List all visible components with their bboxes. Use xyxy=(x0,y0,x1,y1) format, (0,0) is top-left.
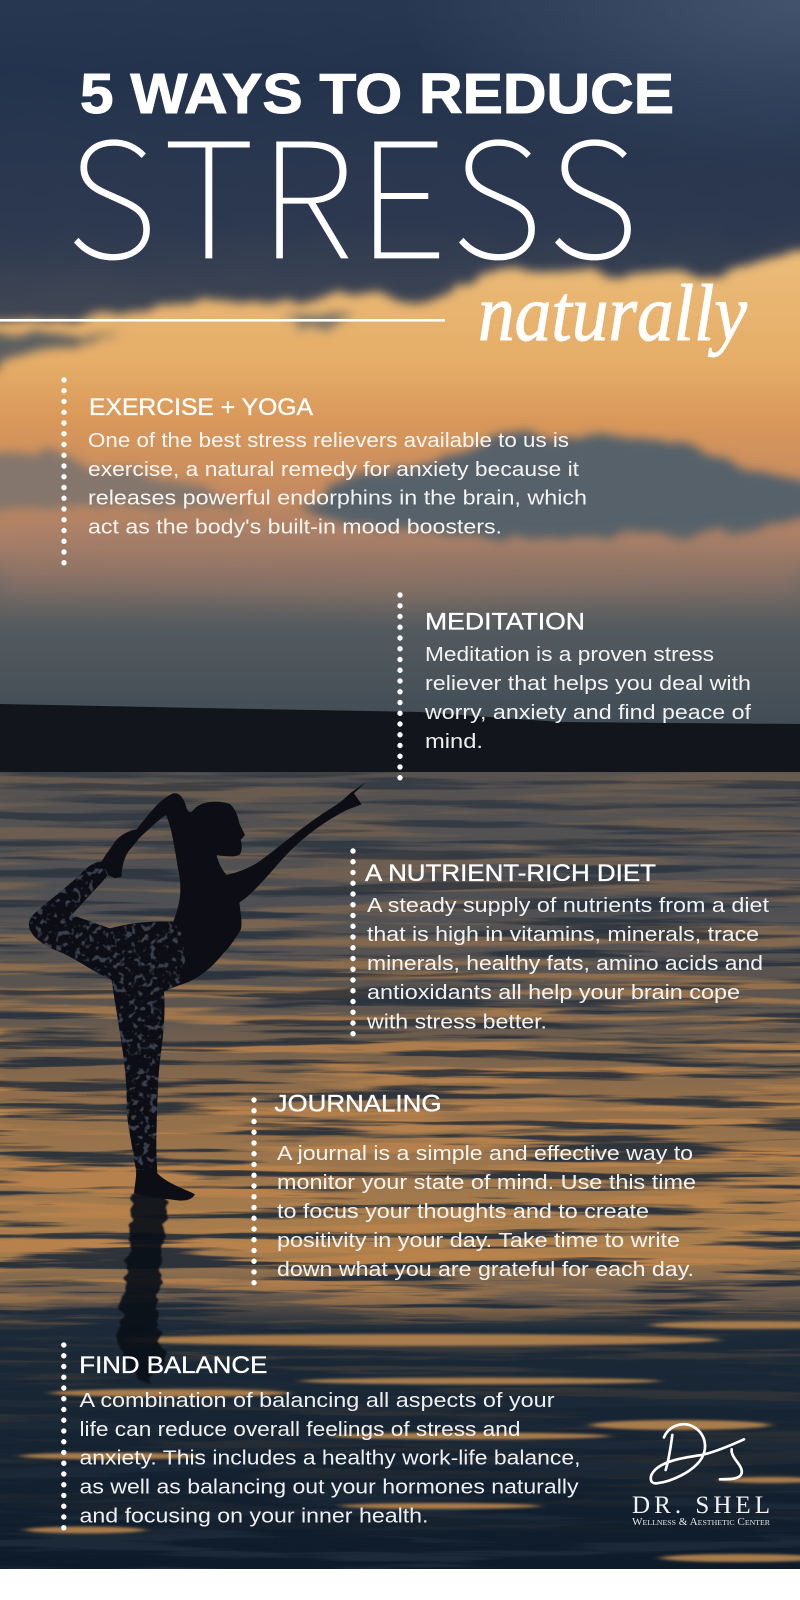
legging texture xyxy=(30,863,186,1170)
water ripples: dark xyxy=(0,772,800,1569)
heading: MEDITATION xyxy=(425,608,585,636)
sky gradient xyxy=(0,0,800,725)
heading: FIND BALANCE xyxy=(79,1352,267,1379)
yoga silhouette with reflection xyxy=(0,760,366,1385)
body text: releases powerful endorphins in the brain, which xyxy=(88,486,587,510)
white strip below the photo xyxy=(0,1569,800,1600)
dark hills on the horizon xyxy=(0,704,800,772)
body text: positivity in your day. Take time to write xyxy=(277,1229,680,1252)
orange reflections on the dark foreground water xyxy=(20,1321,800,1562)
left mid cloud xyxy=(0,452,260,512)
body text: act as the body's built-in mood boosters. xyxy=(88,516,502,538)
body text: Meditation is a proven stress xyxy=(425,643,714,666)
body text xyxy=(80,1389,580,1528)
script word: naturally: naturally xyxy=(478,270,747,358)
water ripples: orange xyxy=(0,772,800,1569)
panel: exercise + yoga xyxy=(64,380,587,564)
top right lighter sky xyxy=(400,0,800,170)
body text: minerals, healthy fats, amino acids and xyxy=(367,952,763,975)
thin cloud wisp xyxy=(280,312,350,334)
panel: journaling xyxy=(254,1090,696,1284)
heading: EXERCISE + YOGA xyxy=(89,394,314,421)
heading: A NUTRIENT-RICH DIET xyxy=(365,860,656,887)
body text: antioxidants all help your brain cope xyxy=(367,981,740,1004)
rule xyxy=(0,319,445,322)
body text: with stress better. xyxy=(366,1010,547,1034)
dotted rule xyxy=(61,1345,66,1529)
logo tagline: Wellness & Aesthetic Center xyxy=(632,1517,770,1528)
low left cloud wisp xyxy=(0,332,115,374)
dotted rule xyxy=(61,380,67,564)
lower cloud band xyxy=(0,520,800,600)
body text: that is high in vitamins, minerals, trace xyxy=(367,923,759,946)
body text xyxy=(277,1142,696,1281)
body text: and focusing on your inner health. xyxy=(80,1504,428,1528)
panel: find balance xyxy=(64,1345,581,1529)
body text xyxy=(88,429,587,538)
body text: One of the best stress relievers available to us is xyxy=(88,429,569,452)
body text: down what you are grateful for each day. xyxy=(277,1258,694,1281)
dark storm cloud xyxy=(0,0,800,322)
body text: life can reduce overall feelings of stress and xyxy=(80,1418,520,1441)
body text: as well as balancing out your hormones naturally xyxy=(80,1476,579,1498)
body text: worry, anxiety and find peace of xyxy=(424,701,751,724)
slate mid cloud xyxy=(300,428,800,540)
body text: mind. xyxy=(425,730,483,753)
silhouette xyxy=(29,782,366,1201)
title xyxy=(0,62,747,358)
body text: A combination of balancing all aspects of your xyxy=(80,1389,555,1412)
body text: exercise, a natural remedy for anxiety because it xyxy=(88,458,579,481)
body text: anxiety. This includes a healthy work-life balance, xyxy=(80,1446,580,1470)
water base xyxy=(0,772,800,1569)
heading: stress: STRESS xyxy=(66,73,638,305)
body text: monitor your state of mind. Use this time xyxy=(277,1171,696,1194)
panel: a nutrient-rich diet xyxy=(353,851,769,1035)
heading: 5 ways to reduce: 5 WAYS TO REDUCE xyxy=(80,62,674,126)
panel: meditation xyxy=(400,595,751,779)
dotted rule xyxy=(397,595,403,779)
body text: A steady supply of nutrients from a diet xyxy=(367,894,769,917)
body text xyxy=(366,894,769,1034)
dotted rule xyxy=(350,851,356,1035)
logo name: DR. SHEL xyxy=(632,1492,770,1519)
body text: A journal is a simple and effective way to xyxy=(277,1142,693,1165)
body text: reliever that helps you deal with xyxy=(425,672,751,695)
body text: to focus your thoughts and to create xyxy=(277,1200,649,1223)
logo: Dr. Shel xyxy=(632,1424,770,1528)
icon: Ds monogram xyxy=(651,1424,744,1483)
reflection xyxy=(118,1195,168,1385)
heading: JOURNALING xyxy=(274,1090,442,1118)
body text xyxy=(424,643,751,753)
dotted rule xyxy=(251,1100,257,1284)
